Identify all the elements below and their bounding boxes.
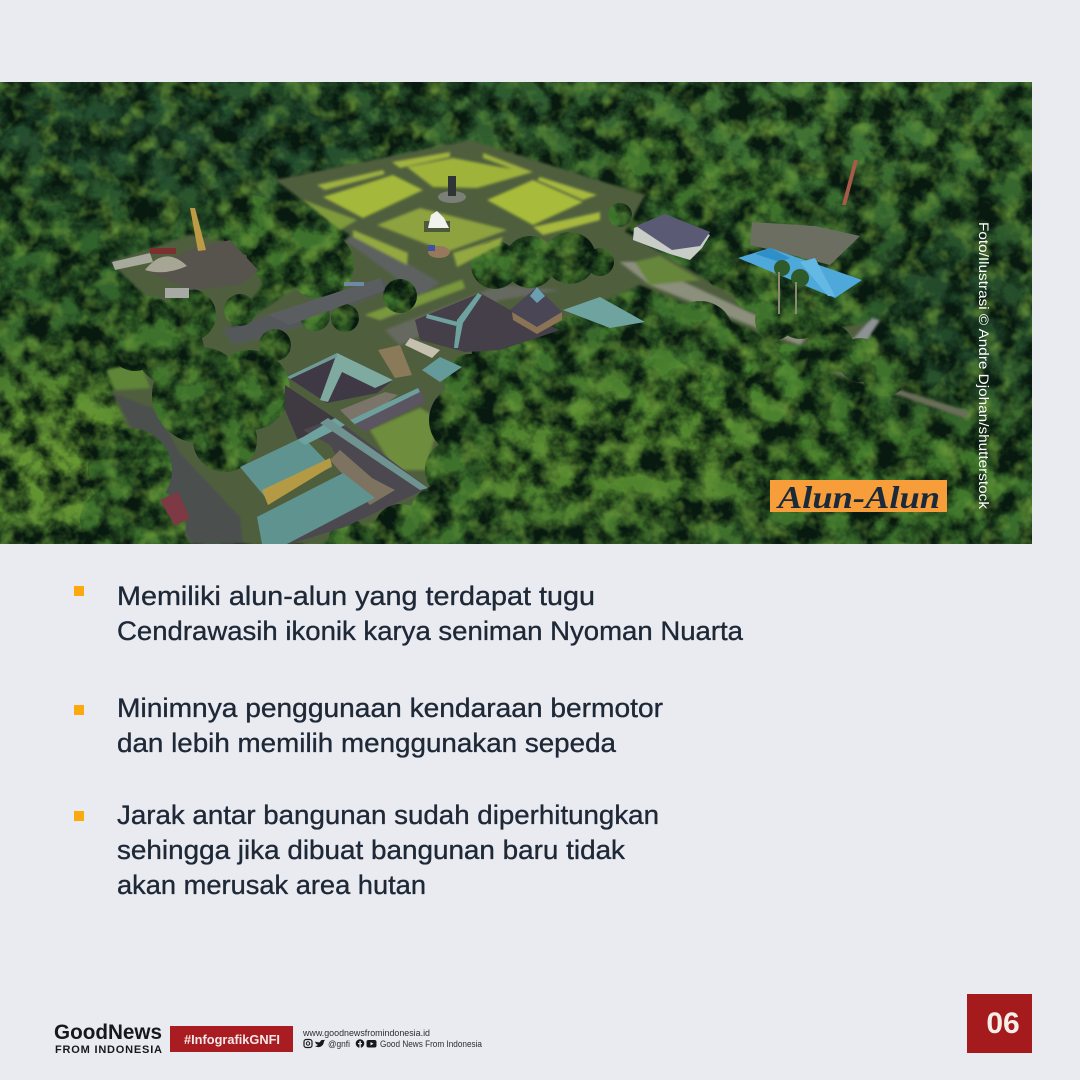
building: dark roof pavilion xyxy=(285,353,425,445)
hashtag badge: #InfografikGNFI xyxy=(184,1033,280,1047)
building: light blue roof xyxy=(738,222,862,298)
logo: GoodNews From Indonesia xyxy=(54,1021,162,1056)
bullet item 1: Memiliki alun-alun yang terdapat tugu xyxy=(117,581,595,611)
building: central roofs xyxy=(378,287,645,382)
page number badge xyxy=(967,994,1032,1053)
parking rows xyxy=(268,278,385,325)
tugu Cendrawasih monument xyxy=(438,176,466,203)
white tent xyxy=(424,211,450,258)
clearing with roads and grass xyxy=(106,140,970,544)
building: purple roof hall xyxy=(633,214,710,260)
bullet item 2: Minimnya penggunaan kendaraan bermotor xyxy=(117,693,663,723)
logo: GoodNews From Indonesia: GoodNews xyxy=(54,1021,162,1044)
logo: GoodNews From Indonesia: FROM INDONESIA xyxy=(55,1044,162,1056)
bullet item 3 xyxy=(74,800,659,900)
panel: aerial photo of the forest campus xyxy=(0,82,1032,544)
forest canopy xyxy=(0,75,1060,550)
palms in front of the blue roof xyxy=(774,260,809,314)
bullet item 3: akan merusak area hutan xyxy=(117,870,426,900)
text block: bullet list xyxy=(74,581,744,900)
footer xyxy=(54,1021,482,1056)
bullet item 2: dan lebih memilih menggunakan sepeda xyxy=(117,728,617,758)
photo credit: Foto/Ilustrasi © Andre Djohan/shutterstock xyxy=(976,222,991,509)
bullet item 1: Cendrawasih ikonik karya seniman Nyoman Nuarta xyxy=(117,616,744,646)
lawns of the alun-alun xyxy=(290,152,600,267)
label: Alun-Alun: Alun-Alun xyxy=(776,479,940,515)
bullet item 1 xyxy=(74,581,744,646)
tree clusters in the clearing xyxy=(80,122,909,564)
page number badge: 06 xyxy=(986,1007,1020,1040)
social handles and icons xyxy=(304,1039,482,1049)
building: cross-shaped hall with teal roofs xyxy=(160,418,428,544)
hashtag badge xyxy=(170,1026,293,1052)
dome building and tower xyxy=(112,208,258,298)
social handles and icons: Good News From Indonesia xyxy=(380,1039,482,1049)
bullet item 2 xyxy=(74,693,663,758)
website: www.goodnewsfromindonesia.id xyxy=(302,1028,430,1038)
social handles and icons: @gnfi xyxy=(328,1039,350,1049)
red and white radio tower xyxy=(842,160,858,205)
bullet item 3: Jarak antar bangunan sudah diperhitungkan xyxy=(117,800,659,830)
bullet item 3: sehingga jika dibuat bangunan baru tidak xyxy=(117,835,626,865)
